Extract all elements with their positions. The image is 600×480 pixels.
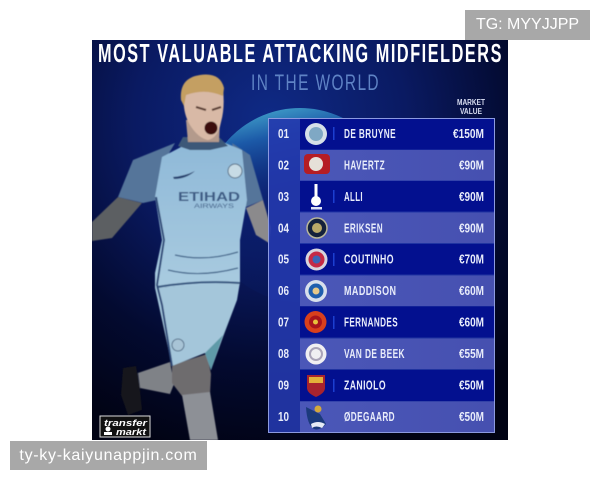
row 04 Eriksen: 04	[278, 222, 289, 236]
row 02 Havertz: 02	[278, 158, 289, 172]
watermark: telegram tag	[465, 10, 590, 40]
row 08 Van de Beek: VAN DE BEEK	[344, 347, 405, 361]
transfermarkt logo: transfer	[104, 418, 148, 428]
row 01 De Bruyne: DE BRUYNE	[344, 127, 396, 141]
transfermarkt logo: markt	[116, 427, 147, 437]
row 03 Alli: ALLI	[344, 190, 363, 204]
row 01 De Bruyne: 01	[278, 127, 289, 141]
row 07 Fernandes: FERNANDES	[344, 316, 398, 330]
row 05 Coutinho: €70M	[459, 252, 484, 266]
row 04 Eriksen: €90M	[459, 222, 484, 236]
column header: market value: VALUE	[460, 107, 483, 116]
column header: market value	[457, 98, 485, 116]
row 06 Maddison: €60M	[459, 284, 484, 298]
row 02 Havertz: HAVERTZ	[344, 158, 385, 172]
row 05 Coutinho	[278, 244, 494, 274]
row 09 Zaniolo: ZANIOLO	[344, 378, 386, 392]
row 02 Havertz: €90M	[459, 158, 484, 172]
row 04 Eriksen	[278, 212, 494, 243]
row 06 Maddison	[278, 276, 494, 306]
row 04 Eriksen: ERIKSEN	[344, 222, 383, 236]
row 03 Alli	[278, 181, 494, 212]
row 01 De Bruyne	[278, 119, 494, 150]
row 03 Alli: 03	[278, 190, 289, 204]
row 09 Zaniolo: 09	[278, 378, 289, 392]
row 10 Odegaard: ØDEGAARD	[344, 410, 395, 424]
transfermarkt logo	[100, 416, 150, 437]
row 08 Van de Beek: €55M	[459, 347, 484, 361]
row 03 Alli: €90M	[459, 190, 484, 204]
row 09 Zaniolo	[278, 370, 494, 401]
row 06 Maddison: MADDISON	[344, 284, 396, 298]
row 01 De Bruyne: €150M	[453, 127, 484, 141]
watermark: website	[10, 441, 207, 470]
watermark: website: ty-ky-kaiyunappjin.com	[19, 447, 198, 464]
row 05 Coutinho: COUTINHO	[344, 252, 394, 266]
row 08 Van de Beek	[278, 338, 494, 369]
background: space poster	[92, 40, 508, 440]
row 07 Fernandes: €60M	[459, 316, 484, 330]
row 07 Fernandes	[278, 306, 494, 338]
row 06 Maddison: 06	[278, 284, 289, 298]
subtitle: IN THE WORLD	[251, 70, 380, 95]
row 07 Fernandes: 07	[278, 316, 289, 330]
watermark: telegram tag: TG: MYYJJPP	[476, 16, 579, 33]
planet	[203, 108, 397, 302]
row 05 Coutinho: 05	[278, 252, 289, 266]
panel: ranking table	[268, 118, 494, 432]
row 08 Van de Beek: 08	[278, 347, 289, 361]
row 10 Odegaard: 10	[278, 410, 289, 424]
row 10 Odegaard	[278, 402, 494, 432]
player illustration	[92, 75, 271, 440]
row 02 Havertz	[278, 150, 494, 180]
row 09 Zaniolo: €50M	[459, 378, 484, 392]
column header: market value: MARKET	[457, 98, 485, 107]
row 10 Odegaard: €50M	[459, 410, 484, 424]
player illustration: AIRWAYS	[194, 204, 234, 210]
player illustration: ETIHAD	[178, 189, 240, 204]
